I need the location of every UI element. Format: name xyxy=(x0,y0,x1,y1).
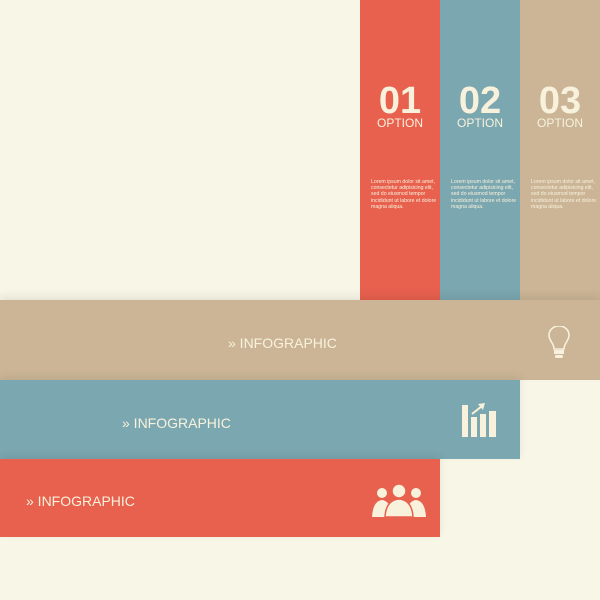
label infographic: » INFOGRAPHIC xyxy=(122,415,231,431)
column 03 xyxy=(520,0,600,300)
column 02 xyxy=(440,0,520,300)
number 01: 01 xyxy=(379,80,421,122)
label infographic: » INFOGRAPHIC xyxy=(228,335,337,351)
icon: bulb xyxy=(548,326,570,358)
text block: Lorem ipsum dolor sit amet, consectetur adipisicing elit, sed do eiusmod tempor incididunt ut labore et dolore magna aliqua. xyxy=(371,179,436,210)
label option: OPTION xyxy=(457,116,503,130)
column 01 xyxy=(360,0,440,300)
text block: Lorem ipsum dolor sit amet, consectetur adipisicing elit, sed do eiusmod tempor incididunt ut labore et dolore magna aliqua. xyxy=(531,179,596,210)
icon: people xyxy=(372,484,426,517)
number 03: 03 xyxy=(539,80,581,122)
band: red xyxy=(0,459,440,537)
text block: Lorem ipsum dolor sit amet, consectetur adipisicing elit, sed do eiusmod tempor incididunt ut labore et dolore magna aliqua. xyxy=(451,179,516,210)
band: tan xyxy=(0,300,600,380)
label option: OPTION xyxy=(377,116,423,130)
label infographic: » INFOGRAPHIC xyxy=(26,493,135,509)
band: blue xyxy=(0,380,520,459)
number 02: 02 xyxy=(459,80,501,122)
label option: OPTION xyxy=(537,116,583,130)
icon: chart xyxy=(462,403,496,437)
